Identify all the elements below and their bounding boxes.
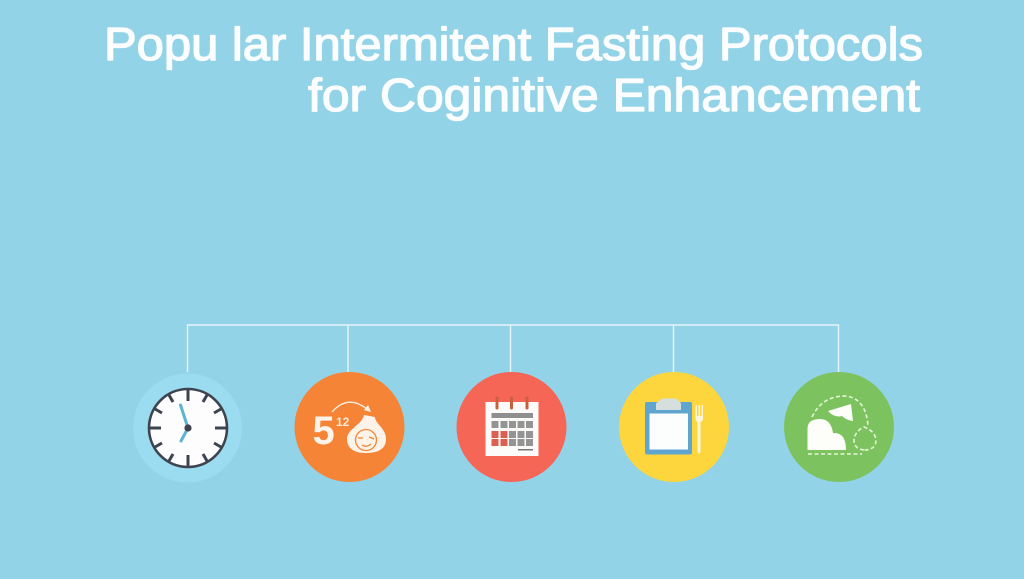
icon: clipboard and fork yellow badge [619,372,729,482]
title: for Coginitive Enhancement [308,69,920,121]
title [104,18,923,121]
connector lines [188,325,838,372]
icon: cloud shapes green badge [784,372,894,482]
icon: calendar red badge [456,372,566,482]
icon: 5:2 diet orange badge [294,372,404,482]
icon: 5:2 diet orange badge: 12 [336,415,350,429]
title: Popu lar Intermitent Fasting Protocols [104,18,923,70]
icon: 5:2 diet orange badge: 5 [312,409,335,453]
icon: clock [133,374,242,482]
